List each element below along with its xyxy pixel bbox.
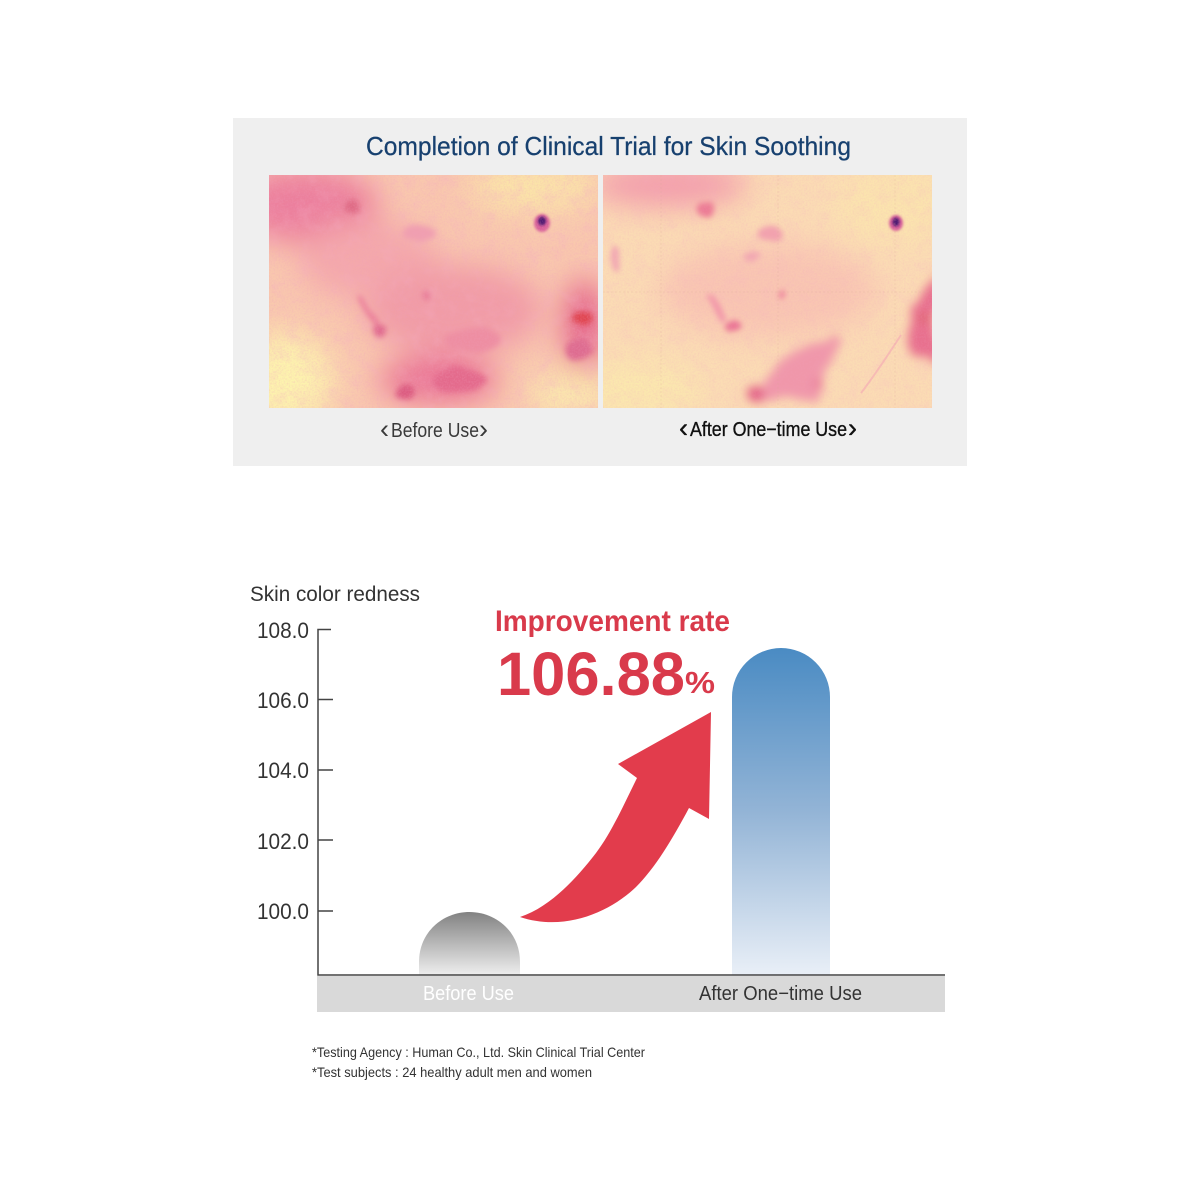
y-axis labels <box>257 618 309 924</box>
skin photo: after one-time use <box>603 175 932 408</box>
x-axis band <box>317 976 945 1012</box>
caption: before use: › <box>479 414 488 444</box>
footnotes <box>312 1044 645 1080</box>
callout: improvement rate: % <box>685 665 715 700</box>
x-axis label: after one-time use: After One−time Use <box>699 983 862 1005</box>
caption: after one-time use <box>679 413 857 443</box>
caption: after one-time use: After One−time Use <box>690 419 847 441</box>
caption: after one-time use: ‹ <box>679 413 688 443</box>
arrow: upward improvement <box>520 712 711 922</box>
panel: clinical trial photos <box>229 118 967 466</box>
bar: before use <box>419 912 520 975</box>
callout: improvement rate: 106.88 <box>497 640 685 708</box>
axis title: Skin color redness <box>250 583 420 606</box>
caption: before use: Before Use <box>391 420 479 442</box>
callout: improvement rate <box>495 605 730 708</box>
panel title: Completion of Clinical Trial for Skin Soothing <box>366 131 851 161</box>
y-axis labels: 108.0 <box>257 618 309 643</box>
y-axis labels: 104.0 <box>257 758 309 783</box>
y-axis labels: 102.0 <box>257 829 309 854</box>
caption: after one-time use: › <box>848 413 857 443</box>
x-axis label: before use: Before Use <box>423 983 514 1005</box>
footnotes: *Testing Agency : Human Co., Ltd. Skin Clinical Trial Center <box>312 1044 645 1060</box>
y-axis labels: 106.0 <box>257 688 309 713</box>
footnotes: *Test subjects : 24 healthy adult men and women <box>312 1064 592 1080</box>
y-axis labels: 100.0 <box>257 899 309 924</box>
chart: skin color redness <box>250 583 945 1012</box>
caption: before use: ‹ <box>380 414 389 444</box>
axes <box>318 630 945 975</box>
bar: after one-time use <box>732 648 830 975</box>
callout: improvement rate: Improvement rate <box>495 605 730 638</box>
caption: before use <box>380 414 488 444</box>
skin photo: before use <box>269 175 598 408</box>
